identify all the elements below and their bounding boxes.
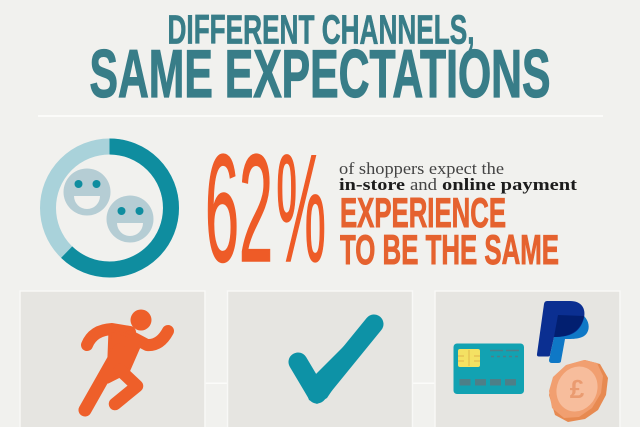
panel: speed xyxy=(20,291,205,427)
title: DIFFERENT CHANNELS, xyxy=(168,6,474,52)
panel: payment methods xyxy=(435,291,620,427)
statement text: online payment xyxy=(442,175,578,194)
big statistic 62%: 62 xyxy=(205,123,273,294)
donut chart with smiling faces xyxy=(48,146,171,270)
icon: pound coin: £ xyxy=(570,374,585,404)
panel: consistency xyxy=(228,291,412,427)
statement highlight xyxy=(340,189,559,273)
statement highlight: EXPERIENCE xyxy=(340,189,506,236)
statement text: in-store xyxy=(339,175,405,194)
icon: smiling face 1 xyxy=(64,168,110,216)
statement text xyxy=(339,159,578,194)
statement text: and xyxy=(410,175,438,194)
title xyxy=(90,6,550,112)
icon: running person xyxy=(85,310,168,410)
icon: pound coin xyxy=(549,360,608,422)
icon: credit card xyxy=(454,344,524,394)
icon: smiling face 2 xyxy=(106,196,154,242)
statement text: of shoppers expect the xyxy=(339,159,504,178)
icon: PayPal logo xyxy=(537,301,589,363)
infographic canvas: % xyxy=(276,123,326,294)
icon: check mark xyxy=(298,324,374,404)
